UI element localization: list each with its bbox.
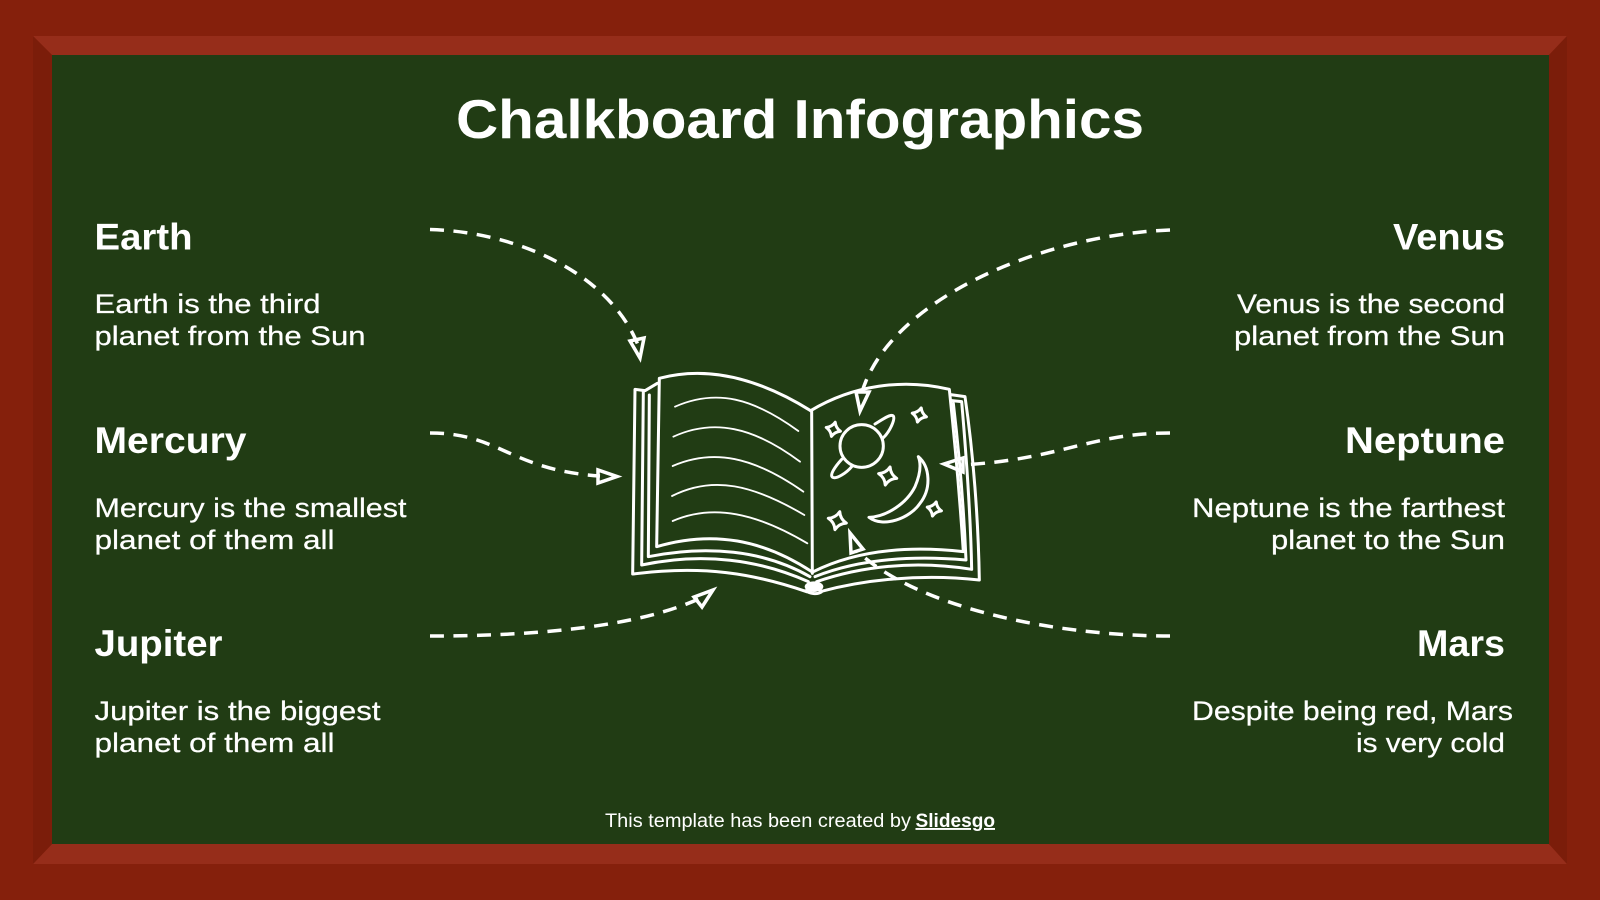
book left page xyxy=(657,373,812,572)
panel: Venus: Venus xyxy=(1393,216,1505,258)
book right page xyxy=(811,384,963,573)
panel: Mercury: planet of them all xyxy=(94,525,334,555)
writing lines xyxy=(672,398,807,543)
arrow: Mars to book xyxy=(850,533,1170,636)
panel: Neptune: Neptune is the farthest xyxy=(1192,493,1506,523)
book left page layers xyxy=(633,383,810,592)
arrow: Venus to book xyxy=(856,230,1170,411)
book spine xyxy=(805,581,823,594)
panel: Venus: Venus is the second xyxy=(1237,289,1505,319)
arrow: Jupiter to book xyxy=(430,590,713,636)
panel: Mars xyxy=(1192,623,1513,758)
footer credit: Slidesgo xyxy=(916,811,995,832)
panel: Jupiter: Jupiter xyxy=(94,623,222,664)
panel: Neptune: Neptune xyxy=(1345,420,1505,461)
planet xyxy=(832,415,894,478)
book right page layers xyxy=(815,395,979,592)
panel: Earth: Earth xyxy=(94,216,192,258)
panel: Earth: planet from the Sun xyxy=(94,321,366,351)
panel: Mercury: Mercury xyxy=(94,420,247,461)
arrow: Mercury to book xyxy=(430,433,617,483)
arrow: Earth to book xyxy=(430,230,644,358)
panel: Jupiter: Jupiter is the biggest xyxy=(94,696,381,726)
icon: open book with planet, moon and stars xyxy=(633,373,979,594)
arrow: Neptune to book xyxy=(944,433,1170,472)
panel: Neptune xyxy=(1192,420,1506,555)
title: Chalkboard Infographics xyxy=(456,88,1144,150)
panel: Mars: Mars xyxy=(1417,623,1505,664)
panel: Venus xyxy=(1234,216,1505,351)
panel: Earth: Earth is the third xyxy=(94,289,320,319)
footer credit: This template has been created by xyxy=(605,811,912,832)
panel: Venus: planet from the Sun xyxy=(1234,321,1505,351)
panel: Neptune: planet to the Sun xyxy=(1271,525,1505,555)
panel: Mercury: Mercury is the smallest xyxy=(94,493,407,523)
stars xyxy=(824,406,943,532)
panel: Jupiter: planet of them all xyxy=(94,728,334,758)
panel: Mars: is very cold xyxy=(1356,728,1505,758)
panel: Earth xyxy=(94,216,366,351)
panel: Mercury xyxy=(94,420,407,555)
moon xyxy=(869,457,928,522)
panel: Mars: Despite being red, Mars xyxy=(1192,696,1513,726)
panel: Jupiter xyxy=(94,623,381,758)
